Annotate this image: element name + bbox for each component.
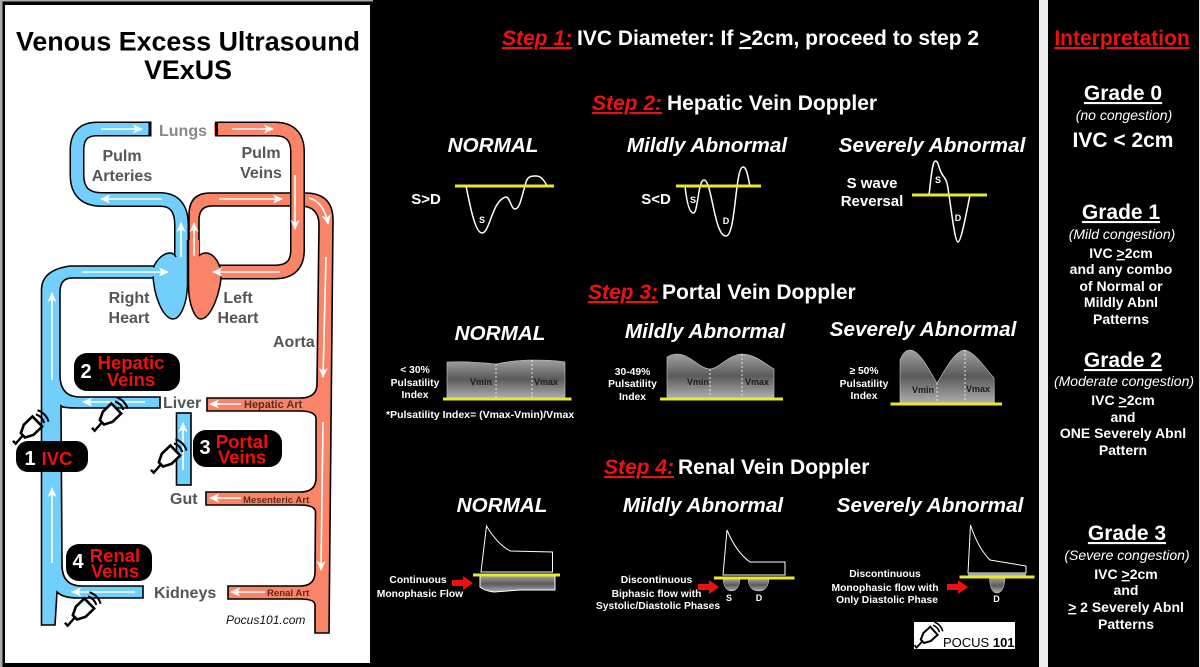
- portal vein normal: *Pulsatility Index= (Vmax-Vmin)/Vmax: [386, 409, 574, 421]
- grade 0: Grade 0: [1084, 82, 1162, 105]
- anatomy labels: Arteries: [92, 168, 152, 185]
- portal vein severely abnormal: Pulsatility: [840, 379, 889, 390]
- portal vein normal: Vmin: [470, 377, 492, 387]
- panel: circulation diagram: [5, 5, 370, 663]
- grade 3: [1064, 522, 1190, 632]
- grade 3: Patterns: [1098, 616, 1154, 632]
- portal vein severely abnormal: [830, 318, 1018, 404]
- badge: 2 hepatic veins: [74, 352, 180, 391]
- hepatic vein severely abnormal: S wave: [847, 175, 897, 192]
- renal vein mildly abnormal: Discontinuous: [621, 575, 693, 586]
- hepatic vein mildly abnormal: S: [690, 195, 696, 205]
- grade 2: Pattern: [1099, 442, 1147, 458]
- badge: 1 IVC: IVC: [42, 448, 72, 469]
- badge: 2 hepatic veins: Veins: [107, 369, 155, 390]
- grade 3: (Severe congestion): [1064, 547, 1190, 563]
- anatomy labels: [92, 123, 315, 627]
- renal vein severely abnormal: Only Diastolic Phase: [836, 595, 938, 606]
- anatomy labels: Pulm: [241, 145, 281, 162]
- anatomy labels: Hepatic Art: [244, 399, 303, 411]
- badge: 3 portal veins: 3: [199, 437, 211, 459]
- heading: interpretation: Interpretation: [1054, 27, 1190, 50]
- grade 3: IVC >2cm: [1094, 566, 1158, 582]
- grade 2: and: [1111, 409, 1135, 425]
- grade 2: [1054, 349, 1194, 458]
- portal vein mildly abnormal: Mildly Abnormal: [625, 320, 786, 343]
- hepatic vein normal: S: [479, 215, 485, 225]
- badge: 1 IVC: [16, 441, 88, 472]
- anatomy labels: Heart: [218, 310, 259, 327]
- grade 2: IVC >2cm: [1091, 392, 1155, 408]
- hepatic vein mildly abnormal: S<D: [641, 191, 671, 208]
- badge: 4 renal veins: 4: [72, 551, 84, 573]
- hepatic vein severely abnormal: [839, 134, 1027, 242]
- grade 0: [1073, 82, 1173, 152]
- portal vein mildly abnormal: Vmin: [687, 377, 709, 387]
- grade 2: (Moderate congestion): [1054, 373, 1194, 389]
- badge: 2 hepatic veins: 2: [80, 361, 92, 383]
- title: [16, 26, 360, 85]
- renal vein mildly abnormal: S: [726, 593, 732, 603]
- grade 1: of Normal or: [1079, 278, 1163, 294]
- badge: 2 hepatic veins: Hepatic: [98, 352, 164, 373]
- portal vein severely abnormal: Index: [851, 391, 878, 402]
- portal vein normal: Vmax: [534, 377, 558, 387]
- logo: POCUS 101: POCUS 101: [943, 635, 1015, 650]
- portal vein mildly abnormal: Index: [619, 392, 646, 403]
- renal vein severely abnormal: D: [993, 594, 1000, 604]
- probe icons: [9, 396, 188, 631]
- hepatic vein severely abnormal: Reversal: [841, 193, 903, 210]
- badge: 4 renal veins: Renal: [90, 545, 140, 566]
- anatomy labels: Right: [109, 290, 150, 307]
- portal vein mildly abnormal: 30-49%: [615, 367, 650, 378]
- heading: step 2: Hepatic Vein Doppler: [667, 92, 877, 115]
- hepatic vein mildly abnormal: [627, 134, 788, 236]
- title: Venous Excess Ultrasound: [16, 26, 360, 56]
- portal vein normal: < 30%: [400, 365, 430, 376]
- renal vein mildly abnormal: Biphasic flow with: [612, 589, 701, 600]
- pulmonary arteries: [77, 122, 182, 262]
- grade 3: > 2 Severely Abnl: [1068, 599, 1184, 615]
- badge: 4 renal veins: Veins: [91, 560, 139, 582]
- renal vein severely abnormal: Severely Abnormal: [837, 494, 1025, 517]
- anatomy labels: Veins: [240, 165, 282, 182]
- badge: 3 portal veins: Veins: [218, 446, 266, 468]
- grade 1: IVC >2cm: [1089, 245, 1153, 261]
- portal vein mildly abnormal: [608, 320, 786, 403]
- hepatic vein severely abnormal: S: [935, 175, 941, 185]
- renal vein normal: [377, 494, 560, 600]
- grade 3: Grade 3: [1088, 522, 1166, 545]
- aorta and arterial branches: [189, 193, 333, 633]
- grade 1: and any combo: [1070, 261, 1172, 277]
- grade 3: and: [1114, 582, 1138, 598]
- pulmonary veins: [214, 122, 298, 272]
- anatomy labels: Lungs: [159, 123, 207, 140]
- portal vein severely abnormal: ≥ 50%: [849, 366, 879, 377]
- anatomy labels: Pulm: [102, 148, 142, 165]
- anatomy labels: Gut: [170, 491, 198, 508]
- hepatic vein severely abnormal: D: [955, 213, 962, 223]
- portal vein normal: NORMAL: [455, 322, 545, 345]
- grade 1: Patterns: [1093, 311, 1149, 327]
- badge: 1 IVC: 1: [24, 448, 36, 470]
- heading: step 4: Step 4:: [604, 456, 674, 479]
- heading: step 2: Step 2:: [592, 92, 662, 115]
- badge: 3 portal veins: [193, 430, 282, 468]
- grade 0: IVC < 2cm: [1073, 129, 1173, 152]
- grade 2: ONE Severely Abnl: [1060, 425, 1186, 441]
- flow arrows: [52, 129, 328, 592]
- renal vein normal: Continuous: [389, 575, 447, 586]
- grade 1: Mildly Abnl: [1084, 294, 1158, 310]
- anatomy labels: Mesenteric Art: [243, 495, 310, 506]
- IVC with hepatic and renal veins: [42, 266, 165, 625]
- anatomy labels: Kidneys: [154, 585, 216, 602]
- renal vein severely abnormal: [832, 494, 1034, 606]
- renal vein mildly abnormal: [596, 494, 794, 612]
- hepatic vein mildly abnormal: Mildly Abnormal: [627, 134, 788, 157]
- portal vein severely abnormal: Severely Abnormal: [830, 318, 1018, 341]
- portal vein mildly abnormal: Pulsatility: [608, 379, 657, 390]
- renal vein mildly abnormal: D: [756, 593, 763, 603]
- portal vein severely abnormal: Vmin: [912, 385, 934, 395]
- hepatic vein normal: S>D: [411, 191, 441, 208]
- portal vein: [176, 413, 191, 485]
- left heart: [188, 240, 228, 319]
- grade 2: Grade 2: [1084, 349, 1162, 372]
- portal vein normal: Pulsatility: [391, 378, 440, 389]
- heading: step 1: Step 1:: [502, 27, 572, 50]
- anatomy labels: Renal Art: [267, 588, 310, 599]
- right heart: [150, 235, 188, 319]
- grade 0: (no congestion): [1076, 107, 1172, 123]
- hepatic vein severely abnormal: Severely Abnormal: [839, 134, 1027, 157]
- renal vein normal: Monophasic Flow: [377, 589, 464, 600]
- panel: interpretation: [1054, 27, 1194, 632]
- hepatic vein normal: [411, 134, 554, 233]
- badge: 3 portal veins: Portal: [216, 431, 268, 452]
- anatomy labels: Aorta: [273, 334, 315, 351]
- renal vein mildly abnormal: Mildly Abnormal: [623, 494, 784, 517]
- heading: step 4: Renal Vein Doppler: [678, 456, 869, 479]
- hepatic vein mildly abnormal: D: [723, 216, 730, 226]
- portal vein normal: [386, 322, 574, 421]
- heading: step 1: IVC Diameter: If >2cm, proceed to step 2: [577, 27, 979, 50]
- logo: POCUS 101: [912, 621, 1015, 652]
- anatomy labels: Left: [223, 290, 253, 307]
- title: VExUS: [144, 55, 232, 85]
- heading: step 3: Portal Vein Doppler: [662, 281, 856, 304]
- renal vein severely abnormal: Monophasic flow with: [832, 583, 938, 594]
- grade 1: [1069, 201, 1175, 327]
- heading: step 3: Step 3:: [588, 281, 658, 304]
- portal vein mildly abnormal: Vmax: [745, 377, 769, 387]
- hepatic vein normal: NORMAL: [448, 134, 538, 157]
- portal vein severely abnormal: Vmax: [966, 384, 990, 394]
- anatomy labels: Liver: [163, 395, 201, 412]
- grade 1: (Mild congestion): [1069, 226, 1175, 242]
- badge: 4 renal veins: [66, 544, 152, 582]
- anatomy labels: Pocus101.com: [226, 613, 305, 627]
- renal vein severely abnormal: Discontinuous: [849, 569, 921, 580]
- renal vein normal: NORMAL: [457, 494, 547, 517]
- anatomy labels: Heart: [109, 310, 150, 327]
- portal vein normal: Index: [402, 390, 429, 401]
- renal vein mildly abnormal: Systolic/Diastolic Phases: [596, 601, 720, 612]
- grade 1: Grade 1: [1082, 201, 1160, 224]
